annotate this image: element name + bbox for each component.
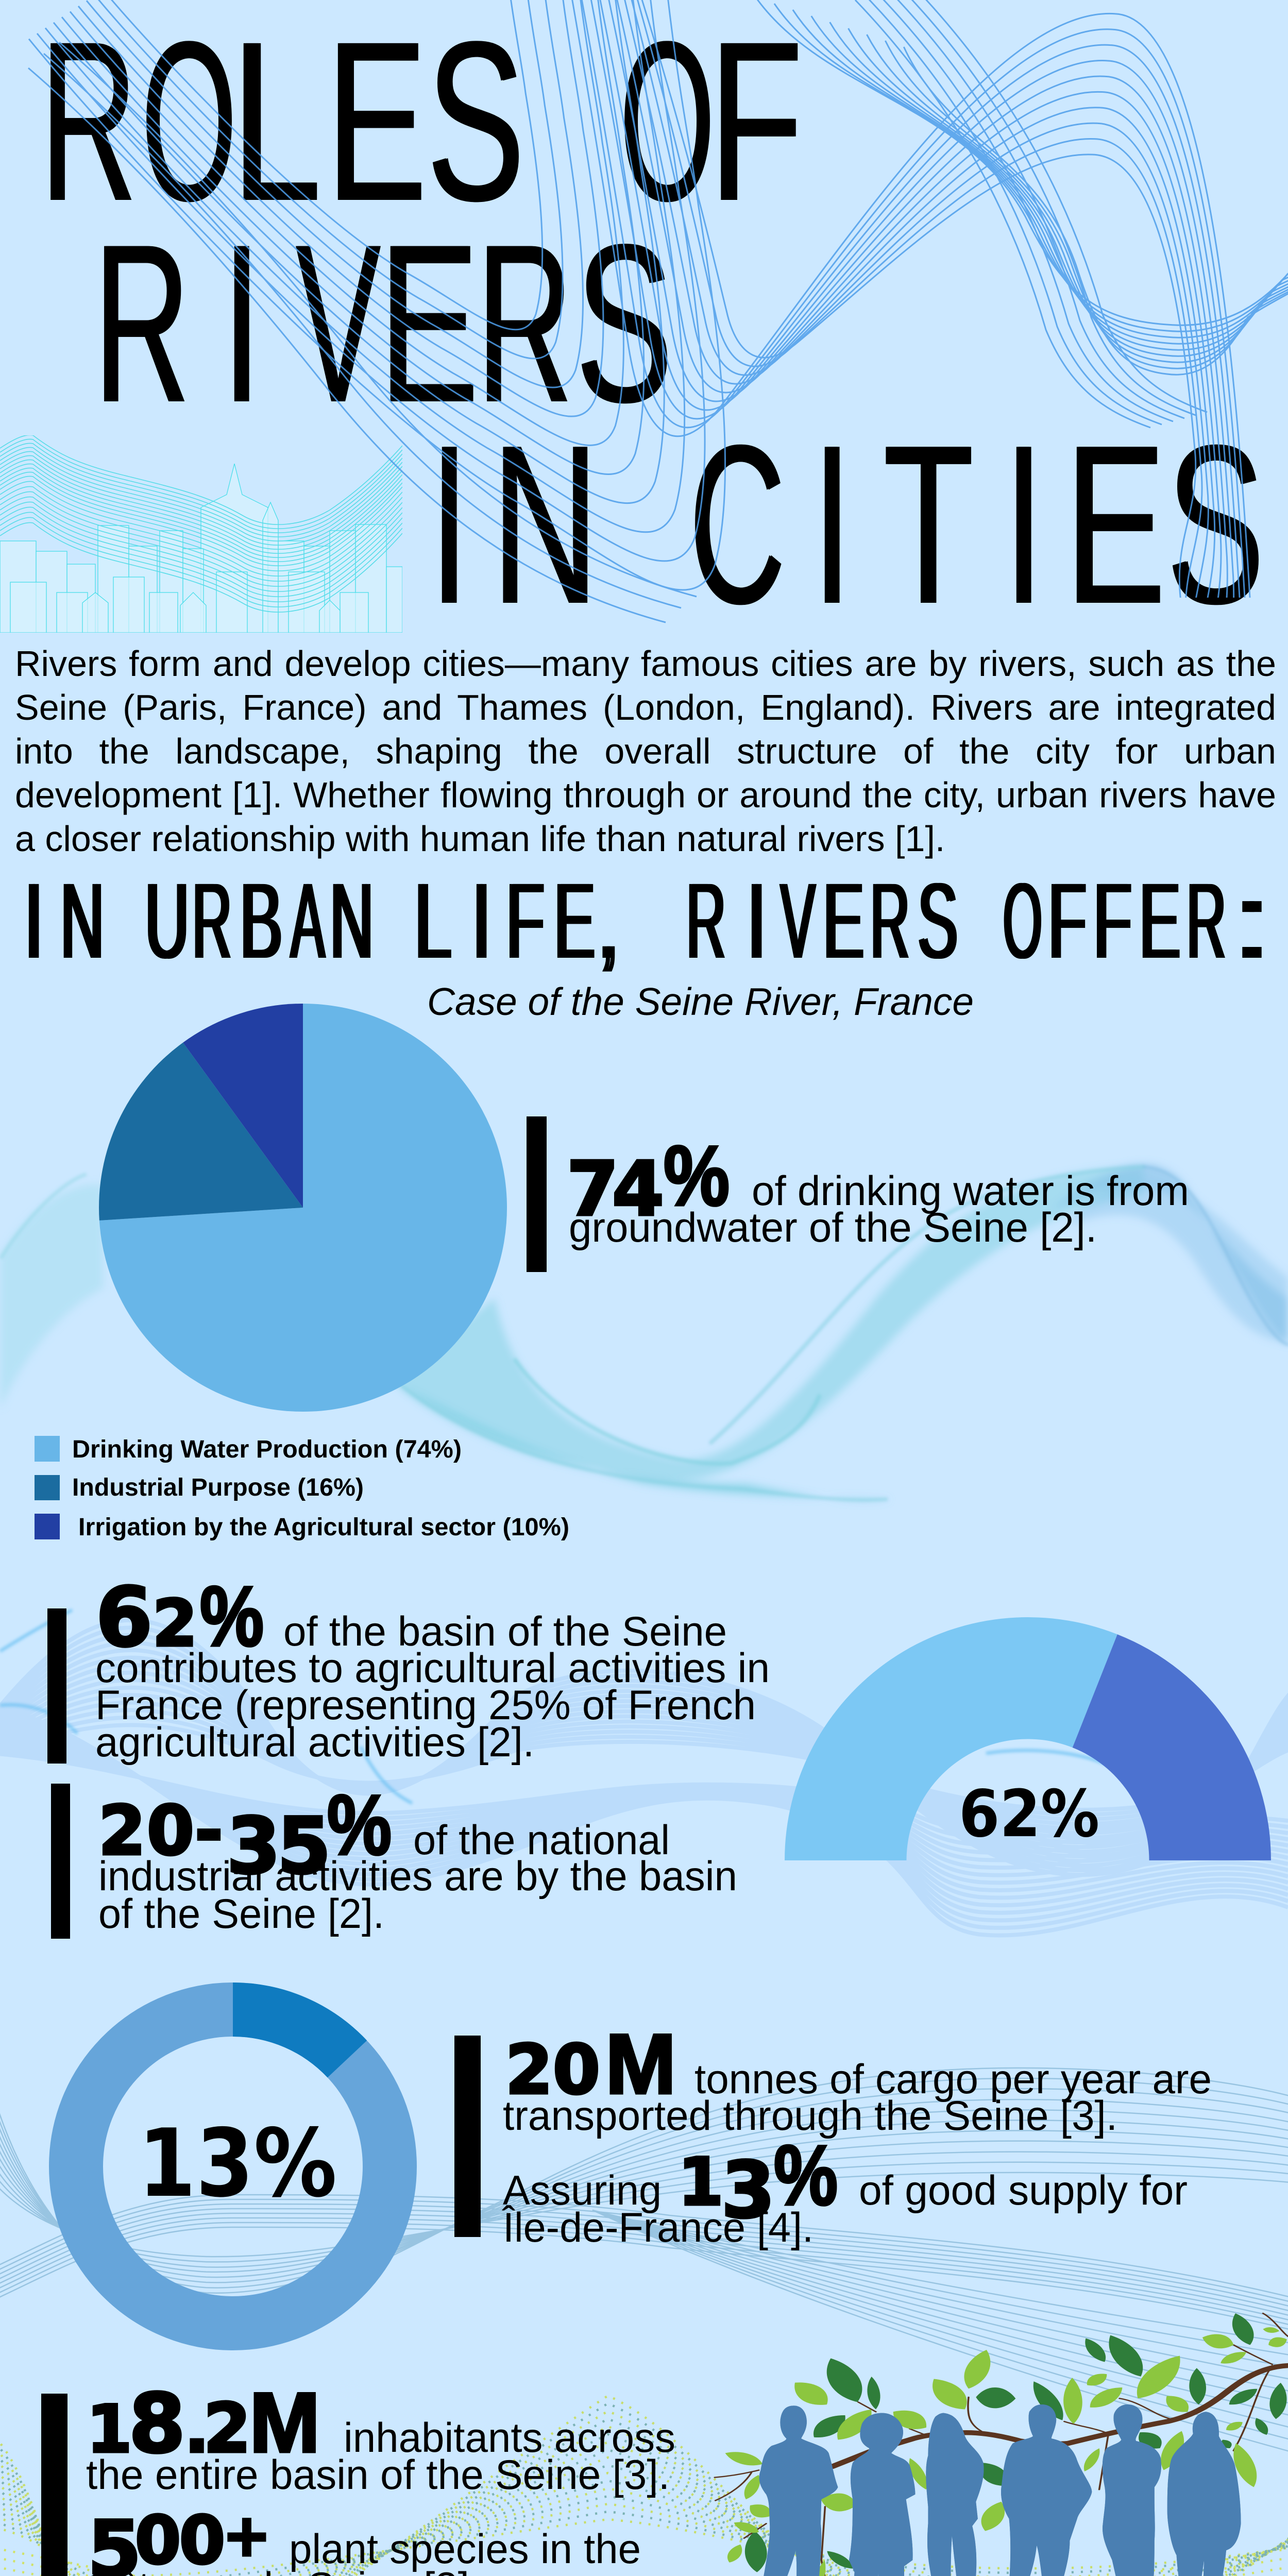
title line 1: R [40, 0, 135, 248]
background: line wave [0, 2068, 1288, 2452]
title line 2 [93, 197, 1259, 605]
title line 1: F [708, 0, 802, 248]
gauge chart: 62%: 62% [959, 1776, 1099, 1852]
legend: pie chart: Irrigation by the Agricultural sector (10%) [78, 1514, 569, 1541]
heading: in urban life: I [23, 861, 41, 981]
background: dotted wave [0, 2396, 1288, 2576]
heading: in urban life: E [821, 861, 862, 981]
pie chart: Seine water use [99, 1004, 507, 1412]
heading: in urban life: N [59, 861, 103, 981]
heading: in urban life: R [869, 861, 908, 981]
heading: in urban life: F [1092, 861, 1130, 981]
stat block: 20M tonnes and 13% supply: Île-de-France [4]. [502, 2205, 814, 2251]
stat block: 74% drinking water: groundwater of the Seine [2]. [569, 1205, 1097, 1251]
heading: in urban life: E [1138, 861, 1178, 981]
stat block: 18.2M inhabitants and 500+ species: 1 [87, 2391, 132, 2467]
stat block: 20M tonnes and 13% supply: of good supply for [859, 2167, 1188, 2214]
heading: in urban life [23, 861, 1266, 981]
heading: in urban life: F [1046, 861, 1084, 981]
legend: pie chart [35, 1436, 569, 1541]
title line 3: T [883, 398, 972, 651]
stat block: 74% drinking water: 7 [567, 1146, 619, 1233]
stat block: 74% drinking water: 4 [612, 1146, 664, 1233]
title line 3: S [1166, 398, 1263, 651]
title line 1: O [141, 0, 236, 248]
stat block: 20-35% industry: of the Seine [2]. [98, 1891, 384, 1937]
title line 1: E [326, 0, 426, 248]
stat block: 20M tonnes and 13% supply: 3 [721, 2146, 775, 2235]
heading: in urban life: S [916, 861, 956, 981]
stat block: 62% agriculture: France (representing 25% of French [95, 1682, 756, 1728]
stat block: 74% drinking water: of drinking water is from [752, 1168, 1189, 1214]
heading: in urban life: R [685, 861, 724, 981]
title line 3 [429, 398, 1263, 651]
heading: in urban life: N [328, 861, 372, 981]
heading: in urban life: B [238, 861, 281, 981]
stat block: 18.2M inhabitants and 500+ species: plant species in the [289, 2526, 641, 2572]
background: smoke river wave [0, 1164, 1288, 1501]
stat block: 62% agriculture [47, 1569, 770, 1766]
stat block: 20-35% industry: % [327, 1777, 392, 1872]
stat block: 18.2M inhabitants and 500+ species: 8 [129, 2377, 185, 2471]
stat block: 20M tonnes and 13% supply: Assuring [503, 2167, 662, 2214]
heading: in urban life: E [552, 861, 593, 981]
illustration: skyline with contour lines [0, 435, 402, 633]
stat block: 20M tonnes and 13% supply: transported through the Seine [3]. [503, 2093, 1117, 2139]
heading: in urban life: L [413, 861, 449, 981]
stat block: 18.2M inhabitants and 500+ species [41, 2375, 675, 2576]
stat block: 18.2M inhabitants and 500+ species: . [184, 2391, 209, 2467]
heading: in urban life: O [1002, 861, 1041, 981]
title line 3: I [1004, 398, 1042, 651]
stat block: 20-35% industry: 0 [147, 1791, 194, 1871]
title line 2: I [222, 197, 260, 449]
title line 3: N [491, 398, 598, 651]
stat block: 20M tonnes and 13% supply: tonnes of cargo per year are [694, 2056, 1212, 2103]
title line 2: S [575, 197, 672, 449]
stat block: 20-35% industry [51, 1777, 737, 1939]
heading: in urban life: V [779, 861, 814, 981]
stat block: 18.2M inhabitants and 500+ species: the entire basin of the Seine [3]. [86, 2452, 670, 2498]
stat block: 20-35% industry: 3 [227, 1802, 280, 1891]
heading: in urban life: : [1231, 861, 1266, 981]
stat block: 74% drinking water [527, 1116, 1189, 1272]
stat block: 20M tonnes and 13% supply [454, 2016, 1212, 2251]
heading: in urban life: , [595, 861, 617, 981]
stat block: 62% agriculture: contributes to agricultural activities in [95, 1645, 770, 1691]
stat block: 18.2M inhabitants and 500+ species: + [223, 2502, 271, 2569]
title line 1: S [426, 0, 523, 248]
illustration: people under a leafy branch [715, 2312, 1288, 2576]
heading: in urban life: F [504, 861, 543, 981]
stat block: 20-35% industry: 5 [277, 1802, 331, 1891]
subtitle: case study: Case of the Seine River, France [427, 980, 974, 1023]
title line 2: V [295, 197, 380, 449]
stat block: 20-35% industry: 2 [98, 1791, 146, 1871]
title line 3: E [1064, 398, 1164, 651]
stat block: 18.2M inhabitants and 500+ species: M [249, 2375, 320, 2470]
stat block: 74% drinking water: % [664, 1128, 730, 1223]
intro paragraph: Rivers form and develop cities—many famous cities are by rivers, such as the Seine (Paris, France) and Thames (London, England). Rivers are integrated into the landscape, shaping the overall structure of the city for urban development [1]. Whether flowing through or around the city, urban rivers have a closer relationship with human life than natural rivers [1]. [15, 643, 1276, 859]
stat block: 20M tonnes and 13% supply: 0 [553, 2030, 600, 2110]
stat block: 20M tonnes and 13% supply: M [605, 2016, 676, 2111]
stat block: 20-35% industry: - [195, 1791, 223, 1871]
legend: pie chart: Industrial Purpose (16%) [72, 1474, 364, 1501]
title line 3: I [812, 398, 851, 651]
stat block: 20M tonnes and 13% supply: % [774, 2128, 838, 2223]
stat block: 62% agriculture: % [200, 1569, 264, 1664]
stat block: 18.2M inhabitants and 500+ species: inhabitants across [344, 2415, 675, 2461]
title line 1 [40, 0, 1259, 605]
heading: in urban life: U [143, 861, 188, 981]
heading: in urban life: A [289, 861, 324, 981]
heading: in urban life: I [470, 861, 489, 981]
background: flowing blue river lines [28, 0, 1288, 623]
stat block: 62% agriculture: of the basin of the Seine [283, 1608, 727, 1655]
stat block: 18.2M inhabitants and 500+ species: 2 [204, 2389, 251, 2468]
stat block: 20M tonnes and 13% supply: 2 [505, 2030, 553, 2110]
title line 2: R [93, 197, 189, 449]
heading: in urban life: R [191, 861, 230, 981]
stat block: 62% agriculture: 6 [96, 1570, 152, 1665]
legend: pie chart: Drinking Water Production (74%) [72, 1436, 462, 1463]
stat block: 20-35% industry: industrial activities are by the basin [98, 1853, 737, 1900]
title line 1: L [230, 0, 320, 248]
donut chart: 13%: 13% [138, 2109, 337, 2218]
gauge chart: 62% [785, 1617, 1271, 1860]
stat block: 20M tonnes and 13% supply: 1 [678, 2144, 723, 2220]
title line 3: C [688, 398, 785, 651]
stat block: 62% agriculture: agricultural activities [2]. [95, 1719, 534, 1766]
background: mesh wave [0, 1610, 1288, 1936]
heading: in urban life: R [1185, 861, 1224, 981]
title line 3: I [429, 398, 468, 651]
stat block: 20-35% industry: of the national [413, 1817, 670, 1863]
donut chart: 13% [76, 1982, 389, 2324]
stat block: 62% agriculture: 2 [152, 1586, 197, 1661]
title line 2: E [378, 197, 478, 449]
title line 2: R [476, 197, 571, 449]
title line 1: O [619, 0, 714, 248]
heading: in urban life: I [745, 861, 764, 981]
